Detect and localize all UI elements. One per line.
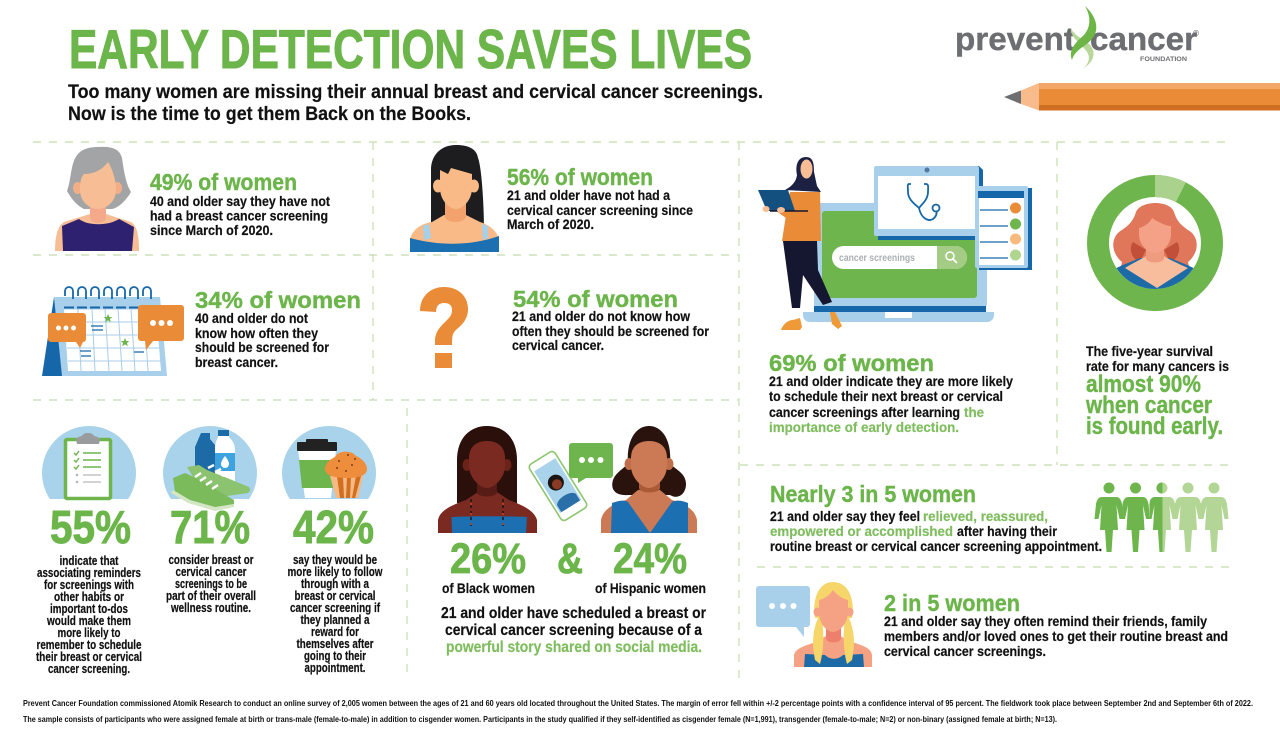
body text: say they would be: [293, 553, 377, 567]
logo: Prevent Cancer Foundation: ®: [1193, 29, 1199, 38]
heading: 49% of women: [150, 169, 297, 195]
body text: cervical cancer screening because of a: [445, 622, 702, 639]
body text: reward for: [311, 625, 359, 639]
ampersand: &: [557, 535, 583, 583]
body text: 21 and older say they often remind their friends, family: [884, 613, 1207, 629]
icon: question mark: [420, 287, 468, 368]
body text: to schedule their next breast or cervical: [769, 388, 1003, 404]
body text: more likely to follow: [288, 565, 383, 579]
icon: Hispanic woman: [601, 426, 697, 533]
body text: 21 and older say they feel: [770, 508, 920, 524]
body text: relieved, reassured,: [923, 508, 1048, 524]
body text: more likely to: [58, 626, 121, 640]
body text: indicate that: [60, 554, 119, 568]
body text: through with a: [301, 577, 370, 591]
body text: breast or cervical: [294, 589, 376, 603]
panel: 54% of women: [420, 286, 709, 368]
body text: often they should be screened for: [512, 323, 709, 339]
panel: 71%: [163, 426, 257, 615]
panel: survival rate: [1085, 186, 1229, 440]
body text: other habits or: [54, 590, 124, 604]
logo: Prevent Cancer Foundation: FOUNDATION: [1140, 57, 1187, 63]
icon: Black woman: [438, 426, 537, 533]
body text: the: [964, 404, 984, 420]
body text: had a breast cancer screening: [150, 208, 328, 224]
body text: since March of 2020.: [150, 222, 273, 238]
body text: 21 and older indicate they are more likely: [769, 373, 1013, 389]
body text: cervical cancer screenings.: [884, 643, 1046, 659]
body text: [770, 508, 1102, 554]
heading: 54% of women: [513, 286, 678, 312]
body text: remember to schedule: [36, 638, 142, 652]
body text: [1086, 343, 1229, 374]
body text: importance of early detection.: [769, 419, 959, 435]
percentage: 26%: 26%: [450, 535, 526, 583]
body text: going to their: [304, 649, 366, 663]
icon: red-haired woman: [1113, 203, 1197, 289]
body text: [195, 310, 329, 370]
body text: [884, 613, 1228, 659]
icon: woman with black hair: [410, 145, 499, 252]
body text: cervical cancer screening since: [507, 202, 693, 218]
body text: for screenings with: [44, 578, 134, 592]
panel: nearly 3 in 5 women: [770, 481, 1228, 554]
body text: [150, 193, 330, 238]
body text: after having their: [957, 523, 1057, 539]
body text: [512, 308, 709, 353]
subtitle: Now is the time to get them Back on the Books.: [68, 104, 471, 125]
icon: blonde woman with speech bubble: [756, 582, 872, 667]
heading: 56% of women: [507, 164, 653, 190]
icon: pencil: [1004, 83, 1280, 110]
body text: breast cancer.: [195, 354, 278, 370]
logo: Prevent Cancer Foundation: [955, 6, 1199, 68]
body text: March of 2020.: [507, 216, 594, 232]
body text: cancer screening.: [48, 662, 130, 676]
label: of Black women: of Black women: [442, 580, 535, 596]
body text: their breast or cervical: [36, 650, 142, 664]
body text: rate for many cancers is: [1086, 358, 1229, 374]
donut chart: almost 90%: [1098, 186, 1212, 300]
percentage: 24%: 24%: [613, 535, 687, 583]
icon: coffee cup and muffin on blue circle: [282, 426, 376, 499]
icon: clipboard on blue circle: [42, 426, 136, 500]
subtitle: Too many women are missing their annual breast and cervical cancer screenings.: [68, 82, 763, 103]
callout: when cancer: [1085, 392, 1212, 419]
body text: members and/or loved ones to get their routine breast and: [884, 628, 1228, 644]
panel: 56% of women: [410, 145, 693, 252]
body text: [288, 553, 383, 675]
body text: themselves after: [296, 637, 374, 651]
body text: would make them: [46, 614, 131, 628]
panel: social media story: [438, 426, 706, 656]
body text: important to-dos: [50, 602, 128, 616]
callout: is found early.: [1086, 413, 1223, 440]
body text: The five-year survival: [1086, 343, 1213, 359]
body text: cervical cancer.: [512, 337, 604, 353]
body text: [507, 187, 693, 232]
body text: appointment.: [304, 661, 366, 675]
panel: 49% of women: [55, 147, 330, 251]
percentage: 71%: [170, 501, 250, 553]
body text: 21 and older have scheduled a breast or: [441, 605, 706, 622]
callout: [1085, 371, 1223, 440]
body text: powerful story shared on social media.: [446, 639, 702, 656]
illustration: woman searching for cancer screenings on laptop: cancer screenings: [839, 253, 915, 264]
body text: know how often they: [195, 325, 318, 341]
icon: phone with speech bubble: [528, 443, 613, 522]
body text: they planned a: [300, 613, 370, 627]
subtitle: [68, 82, 763, 125]
body text: empowered or accomplished: [770, 523, 953, 539]
percentage: 42%: [293, 501, 374, 553]
body text: part of their overall: [166, 589, 256, 603]
icon: grey-haired woman: [55, 147, 139, 251]
body text: consider breast or: [168, 553, 254, 567]
heading: 34% of women: [195, 287, 361, 313]
icon: five women pictogram, three filled: [1094, 482, 1228, 552]
panel: 69% of women: [758, 157, 1032, 435]
body text: cervical cancer: [176, 565, 247, 579]
heading: Nearly 3 in 5 women: [770, 481, 976, 507]
body text: associating reminders: [37, 566, 141, 580]
panel: 42%: [282, 426, 383, 675]
body text: [769, 373, 1013, 435]
callout: almost 90%: [1086, 371, 1201, 398]
body text: routine breast or cervical cancer screening appointment.: [770, 538, 1102, 554]
body text: 21 and older do not know how: [512, 308, 690, 324]
logo: Prevent Cancer Foundation: cancer: [1090, 21, 1197, 57]
body text: [441, 605, 706, 656]
icon: water bottles and sneakers on blue circle: [163, 426, 257, 520]
illustration: woman searching for cancer screenings on laptop: [758, 157, 1032, 330]
body text: should be screened for: [195, 339, 329, 355]
body text: 40 and older say they have not: [150, 193, 330, 209]
body text: screenings to be: [175, 577, 247, 591]
body text: [36, 554, 142, 676]
logo: Prevent Cancer Foundation: prevent: [955, 21, 1075, 57]
heading: 2 in 5 women: [884, 590, 1020, 616]
title: EARLY DETECTION SAVES LIVES: [69, 18, 752, 80]
percentage: 55%: [50, 501, 131, 553]
panel: 2 in 5 women: [756, 582, 1228, 667]
icon: calendar with speech bubbles: [42, 287, 184, 376]
body text: wellness routine.: [170, 601, 251, 615]
body text: cancer screening if: [290, 601, 381, 615]
footnote: The sample consists of participants who were assigned female at birth or trans-male (female-to-male) in addition to cisgender women. Participants in the study qualified if they self-identified as cisgender female (N=1,991), transgender (female-to-male; N=2) or non-binary (assigned female at birth; N=13).: [23, 714, 1057, 724]
label: of Hispanic women: of Hispanic women: [595, 580, 706, 596]
body text: 40 and older do not: [195, 310, 308, 326]
body text: [166, 553, 256, 615]
panel: 55%: [36, 426, 142, 676]
body text: 21 and older have not had a: [507, 187, 670, 203]
heading: 69% of women: [769, 350, 934, 376]
footnote: [23, 698, 1253, 724]
panel: 34% of women: [42, 287, 361, 376]
body text: cancer screenings after learning: [769, 404, 960, 420]
